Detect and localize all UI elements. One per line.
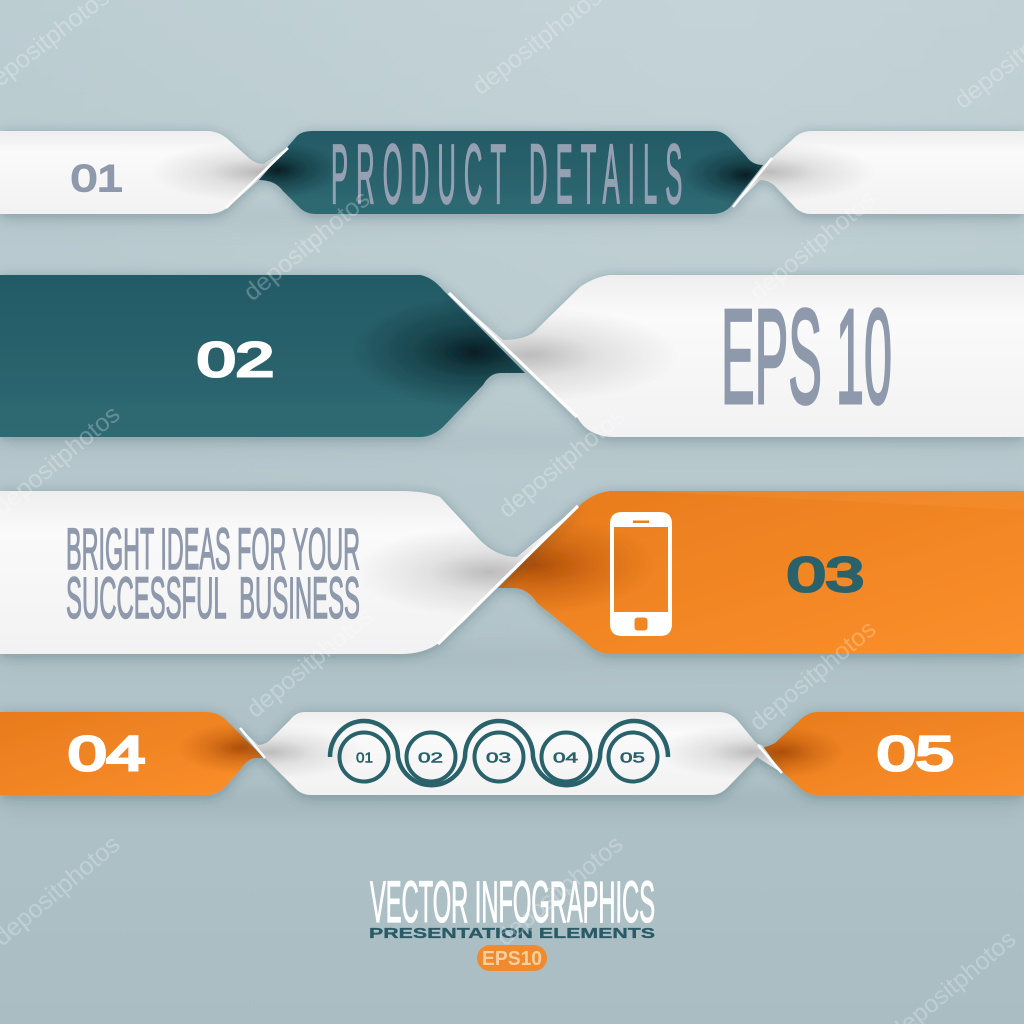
number 02: 02: [197, 334, 274, 387]
white twist edge: [226, 148, 288, 208]
badge: EPS10: EPS10: [482, 948, 542, 970]
white centre ribbon: [175, 712, 847, 795]
step labels: 02: [418, 750, 443, 766]
orange ribbon: 05: [720, 712, 1024, 795]
step labels: 03: [486, 750, 511, 766]
step labels: 04: [553, 750, 578, 766]
icon: smartphone: [610, 512, 672, 636]
step rings: [340, 732, 658, 782]
watermarks: depositphotos: [491, 830, 628, 952]
number 05: 05: [877, 728, 954, 781]
orange ribbon: 03: [415, 491, 1024, 654]
watermarks: depositphotos: [744, 185, 881, 307]
subtitle: presentation elements: PRESENTATION ELEMENTS: [369, 925, 655, 942]
number 04: 04: [68, 728, 145, 781]
number 03: 03: [787, 549, 864, 602]
watermarks: depositphotos: [744, 615, 881, 737]
step labels: [356, 750, 645, 766]
process chain 01-05: [330, 721, 668, 785]
ribbon row 3: BRIGHT IDEAS FOR YOUR: [66, 517, 360, 582]
step labels: 01: [356, 750, 373, 766]
number 01: 01: [71, 158, 123, 199]
white ribbon: 01: [0, 131, 360, 214]
ribbon row 2: [0, 275, 1024, 437]
ribbon row 1: [0, 129, 1024, 222]
teal title ribbon: [216, 131, 807, 214]
footer title block: [369, 870, 655, 971]
text: bright ideas: [66, 517, 360, 631]
white ribbon: EPS 10: [380, 275, 1024, 437]
ribbon row 3: [0, 491, 1024, 654]
ribbon row 4: [0, 712, 1024, 795]
white ribbon: bright ideas: [0, 491, 625, 654]
orange ribbon: 04: [0, 712, 302, 795]
watermarks: depositphotos: [493, 402, 630, 524]
step labels: 05: [620, 750, 645, 766]
white ribbon: right end: [665, 131, 1024, 214]
wave line: [330, 721, 668, 785]
heading: product details: PRODUCT DETAILS: [331, 129, 682, 222]
ribbon row 3: SUCCESSFUL BUSINESS: [66, 566, 360, 631]
teal ribbon: 02: [0, 275, 600, 437]
watermarks: depositphotos: [241, 602, 378, 724]
watermarks: depositphotos: [238, 185, 375, 307]
